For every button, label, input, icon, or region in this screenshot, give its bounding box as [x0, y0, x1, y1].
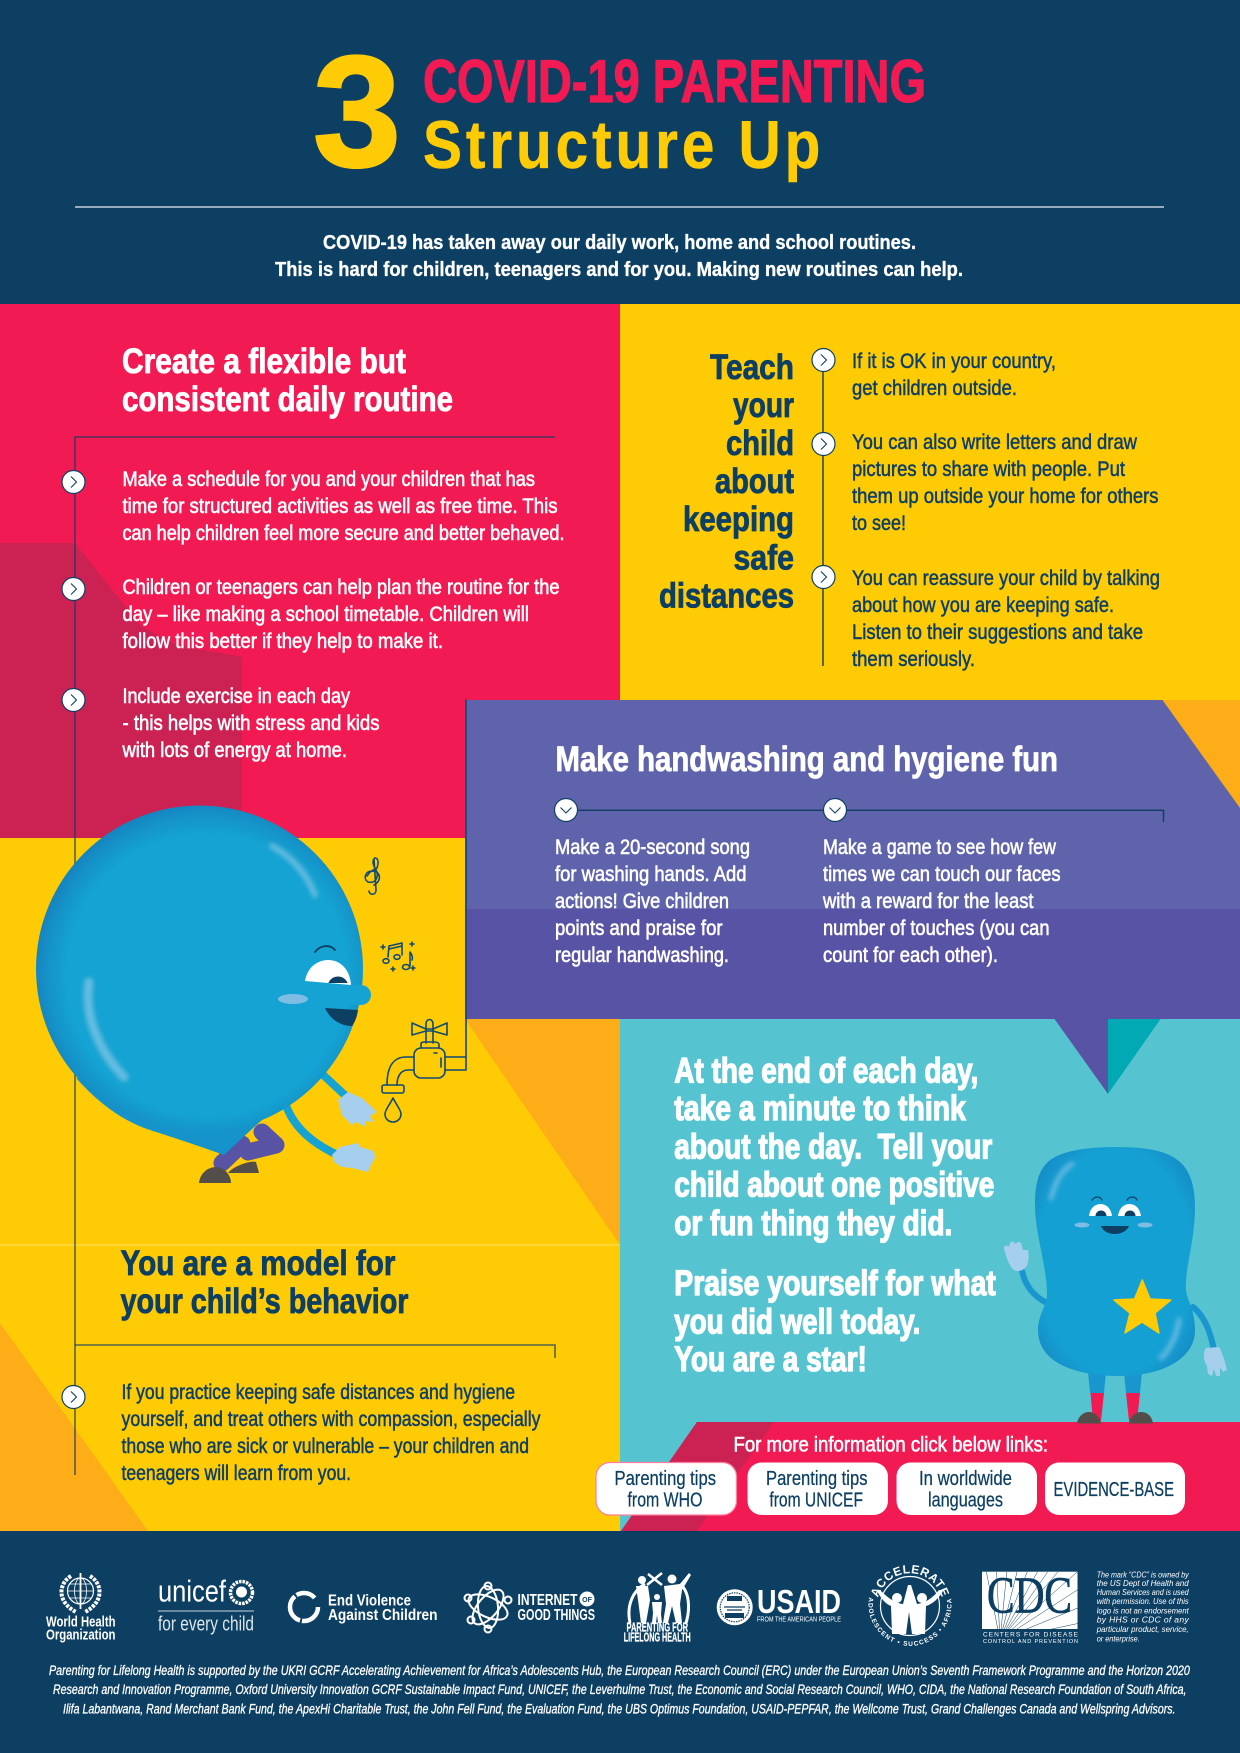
- highlights: [88, 846, 315, 1077]
- icon: music notes: [381, 942, 415, 971]
- text: game: Make a game to see how few: [823, 835, 1056, 859]
- text: CDC mark disclaimer: [1096, 1569, 1189, 1643]
- logo: USAID: [717, 1583, 841, 1625]
- hands: [1004, 1242, 1227, 1376]
- text: outside: If it is OK in your country,: [852, 349, 1056, 373]
- logo: CDC: CDC: [987, 1568, 1072, 1624]
- legs: [222, 1132, 276, 1163]
- text: schedule: Make a schedule for you and your children that has: [122, 467, 535, 491]
- text: model: If you practice keeping safe distances and hygiene: [122, 1380, 515, 1404]
- text: game: with a reward for the least: [822, 889, 1034, 913]
- text: CDC mark disclaimer: the US Dept of Health and: [1097, 1578, 1189, 1588]
- text: CDC mark disclaimer: with permission. Use of this: [1097, 1596, 1189, 1606]
- heading: handwashing: Make handwashing and hygiene fun: [556, 740, 1058, 779]
- text: reassure: Listen to their suggestions and take: [852, 620, 1143, 644]
- text: funding acknowledgement: [49, 1663, 1190, 1716]
- text: end of day reflection: At the end of each day,: [674, 1051, 978, 1090]
- text: song: [555, 835, 750, 967]
- bullet: reassure: [812, 566, 835, 588]
- heading: teach safe distances: [659, 348, 794, 616]
- panel: footer background: [0, 1531, 1240, 1753]
- logo: Internet of Good Things: [464, 1582, 595, 1632]
- shoes: [199, 1162, 259, 1183]
- highlights: [1051, 1164, 1179, 1358]
- text: CDC mark disclaimer: particular product, service,: [1096, 1624, 1189, 1634]
- text: model: [122, 1380, 541, 1485]
- logo: unicef for every child: unicef: [158, 1574, 226, 1609]
- text: reassure: [852, 566, 1160, 671]
- text: model: teenagers will learn from you.: [122, 1461, 351, 1485]
- heading: teach safe distances: Teach: [710, 348, 794, 387]
- bullet: model: [62, 1386, 85, 1408]
- button: evidence base: EVIDENCE-BASE: [1054, 1479, 1174, 1501]
- text: exercise: - this helps with stress and kids: [122, 711, 380, 735]
- heading: create a routine: Create a flexible but: [122, 342, 406, 381]
- text: outside: [852, 349, 1056, 400]
- text: end of day reflection: you did well today.: [674, 1302, 920, 1341]
- logo: World Health Organization: [46, 1573, 116, 1644]
- hands: [332, 1092, 377, 1172]
- logo: CDC: [982, 1572, 1078, 1643]
- face: [1074, 1197, 1152, 1234]
- text: end of day reflection: You are a star!: [674, 1340, 867, 1379]
- icon: treble clef: [365, 858, 379, 894]
- logo: Internet of Good Things: INTERNET: [518, 1592, 578, 1609]
- text: letters: pictures to share with people. Put: [852, 457, 1125, 481]
- text: CDC mark disclaimer: by HHS or CDC of any: [1097, 1614, 1189, 1624]
- button: evidence base: [1045, 1462, 1185, 1515]
- text: reassure: about how you are keeping safe.: [852, 593, 1114, 617]
- heading: teach safe distances: your: [733, 386, 794, 425]
- heading: teach safe distances: safe: [734, 538, 794, 578]
- text: links heading: For more information click below links:: [734, 1433, 1048, 1457]
- logo: End Violence Against Children: Against Children: [328, 1607, 438, 1624]
- logo: unicef for every child: for every child: [158, 1614, 254, 1636]
- logo: CDC: CONTROL AND PREVENTION: [983, 1639, 1078, 1645]
- heading: teach safe distances: distances: [659, 576, 794, 616]
- text: song: points and praise for: [555, 916, 722, 940]
- timeline: left vertical connector: [75, 437, 555, 1475]
- text: exercise: with lots of energy at home.: [122, 738, 347, 762]
- arms: [287, 1072, 348, 1156]
- text: exercise: [122, 684, 380, 762]
- text: plan together: [122, 575, 560, 653]
- bullet: game: [824, 798, 846, 822]
- title line: Structure Up: Structure Up: [423, 108, 820, 183]
- button: parenting tips from UNICEF: Parenting tips: [766, 1468, 868, 1490]
- panel: yellow safe distances background: [620, 304, 1240, 700]
- text: game: count for each other).: [823, 943, 998, 967]
- logo: CDC: CENTERS FOR DISEASE: [983, 1632, 1079, 1639]
- text: plan together: Children or teenagers can help plan the routine for the: [122, 575, 560, 599]
- text: song: actions! Give children: [555, 889, 729, 913]
- text: schedule: [122, 467, 564, 545]
- button: parenting tips from WHO: Parenting tips: [614, 1468, 716, 1490]
- text: CDC mark disclaimer: The mark “CDC” is owned by: [1097, 1569, 1189, 1579]
- button: parenting tips from WHO: from WHO: [628, 1490, 702, 1512]
- text: end of day reflection: about the day. Tell your: [674, 1127, 993, 1166]
- text: letters: them up outside your home for others: [852, 484, 1158, 508]
- logo: World Health Organization: Organization: [46, 1626, 116, 1644]
- heading: create a routine: [122, 342, 453, 419]
- logo: USAID: FROM THE AMERICAN PEOPLE: [757, 1617, 841, 1624]
- body: [76, 1078, 262, 1155]
- legs and socks: [1088, 1372, 1142, 1421]
- text: song: regular handwashing.: [555, 943, 729, 967]
- intro text: COVID-19 has taken away our daily work, home and school routines.: [323, 232, 916, 254]
- heading: you are a model: You are a model for: [120, 1244, 396, 1283]
- logo: Parenting for Lifelong Health: [624, 1573, 691, 1645]
- button: parenting tips from UNICEF: from UNICEF: [769, 1490, 863, 1512]
- panel: pink links banner: [621, 1422, 1240, 1531]
- panel: teal reflection background: [620, 1019, 1240, 1531]
- text: reassure: them seriously.: [852, 647, 975, 671]
- heading: teach safe distances: child: [726, 424, 794, 463]
- button: worldwide languages: In worldwide: [919, 1468, 1012, 1490]
- logo: Accelerate: ACCELERATE: [871, 1565, 950, 1598]
- big number 3: 3: [313, 24, 401, 200]
- bullet: outside: [812, 348, 835, 372]
- text: letters: to see!: [852, 511, 906, 535]
- text: letters: You can also write letters and draw: [852, 430, 1137, 454]
- icon: water tap: [382, 700, 466, 1122]
- text: game: [822, 835, 1060, 967]
- logo: Parenting for Lifelong Health: LIFELONG HEALTH: [624, 1630, 691, 1645]
- panel: purple handwashing speech bubble: [465, 700, 1240, 1094]
- text: song: Make a 20-second song: [555, 835, 750, 859]
- button: parenting tips from WHO: [596, 1462, 736, 1515]
- logo: USAID: USAID: [757, 1583, 841, 1620]
- text: game: number of touches (you can: [823, 916, 1050, 940]
- title block: [313, 24, 926, 200]
- text: letters: [852, 430, 1158, 535]
- text: end of day reflection: Praise yourself for what: [674, 1264, 996, 1303]
- button: worldwide languages: languages: [928, 1490, 1003, 1512]
- text: CDC mark disclaimer: logo is not an endorsement: [1097, 1605, 1189, 1615]
- logo: Accelerate: ADOLESCENT • SUCCESS • AFRICA: [868, 1597, 952, 1646]
- logo: Internet of Good Things: GOOD THINGS: [518, 1607, 595, 1624]
- text: model: those who are sick or vulnerable – your children and: [122, 1434, 529, 1458]
- logo: Internet of Good Things: OF: [582, 1597, 593, 1604]
- text: model: yourself, and treat others with compassion, especially: [122, 1407, 541, 1431]
- logo: unicef for every child: [158, 1574, 254, 1636]
- text: schedule: can help children feel more secure and better behaved.: [122, 521, 564, 545]
- text: schedule: time for structured activities as well as free time. This: [122, 494, 558, 518]
- logo: Accelerate: [868, 1565, 952, 1646]
- bullet: exercise: [62, 688, 85, 712]
- text: song: for washing hands. Add: [555, 862, 746, 886]
- text: outside: get children outside.: [852, 376, 1017, 400]
- bullet: plan together: [62, 578, 85, 600]
- panel: pink routine background: [0, 304, 620, 838]
- face: [278, 946, 371, 1026]
- shoes: [1077, 1412, 1153, 1424]
- logo: End Violence Against Children: End Violence: [328, 1593, 411, 1610]
- arms: [1022, 1271, 1214, 1350]
- text: reassure: You can reassure your child by talking: [852, 566, 1160, 590]
- heading: teach safe distances: about: [715, 462, 794, 501]
- heading: create a routine: consistent daily routine: [122, 380, 453, 419]
- button: worldwide languages: [896, 1462, 1037, 1515]
- logo: End Violence Against Children: [290, 1593, 438, 1624]
- panel: header background: [0, 0, 1240, 304]
- button: parenting tips from UNICEF: [748, 1462, 888, 1515]
- intro text: [275, 232, 963, 281]
- panel: yellow model background: [0, 838, 620, 1531]
- text: CDC mark disclaimer: or enterprise.: [1097, 1633, 1140, 1643]
- text: exercise: Include exercise in each day: [122, 684, 350, 708]
- heading: you are a model: your child’s behavior: [120, 1282, 409, 1321]
- title line: COVID-19 Parenting: COVID-19 PARENTING: [423, 48, 926, 115]
- heading: you are a model: [120, 1244, 409, 1321]
- text: end of day reflection: [674, 1051, 996, 1379]
- bullet: song: [554, 798, 578, 822]
- text: end of day reflection: or fun thing they did.: [674, 1204, 952, 1243]
- body: [1035, 1147, 1195, 1376]
- logo: World Health Organization: World Health: [46, 1614, 116, 1631]
- character: small blue figure with star: [1004, 1147, 1227, 1424]
- text: CDC mark disclaimer: Human Services and is used: [1097, 1587, 1189, 1597]
- intro text: This is hard for children, teenagers and for you. Making new routines can help.: [275, 259, 963, 281]
- text: plan together: follow this better if they help to make it.: [122, 629, 443, 653]
- heading: teach safe distances: keeping: [683, 500, 794, 539]
- bullet: schedule: [62, 470, 85, 494]
- bullet: letters: [812, 432, 835, 456]
- icon: yellow star: [1114, 1280, 1171, 1333]
- character: big blue round figure washing hands: [36, 806, 377, 1183]
- text: end of day reflection: take a minute to think: [674, 1089, 966, 1128]
- text: game: times we can touch our faces: [823, 862, 1060, 886]
- logo: Parenting for Lifelong Health: PARENTING FOR: [626, 1620, 688, 1635]
- text: end of day reflection: child about one positive: [674, 1166, 994, 1205]
- text: plan together: day – like making a school timetable. Children will: [122, 602, 529, 626]
